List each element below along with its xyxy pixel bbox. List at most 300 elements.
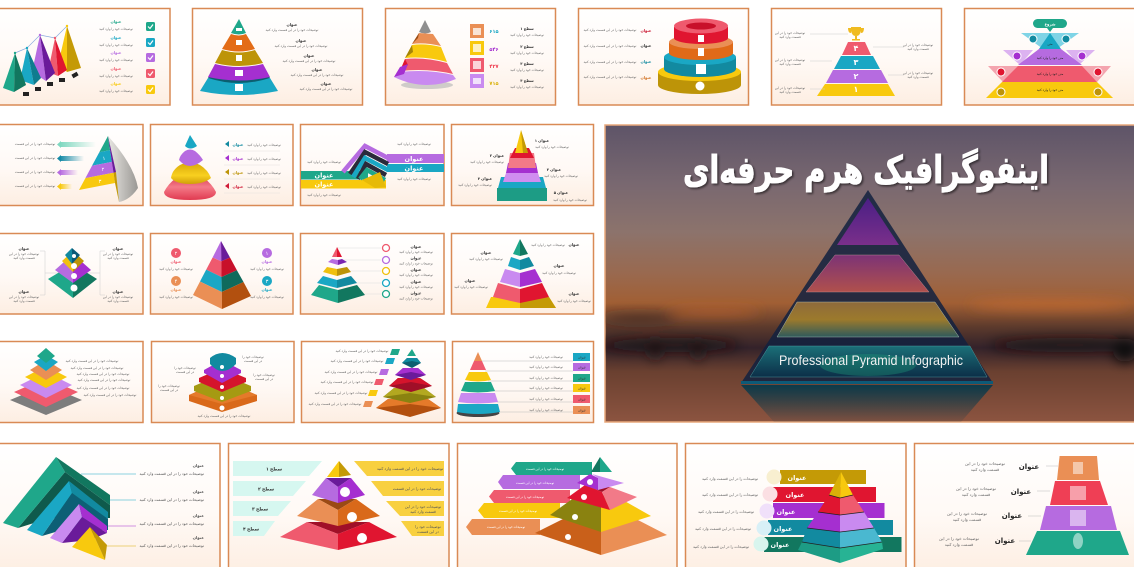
numbered circles [997,35,1102,96]
arrow text: توضیحات خود را در این قسمت [15,184,55,188]
values: ۵۴۶ [489,47,499,53]
numbered circles: ۲ [175,251,178,257]
band text: عنوان [315,172,333,180]
text notes: عنوان [18,290,30,294]
panel: curved layered pyramid [192,8,362,105]
text list: توضیحات خود را در این قسمت وارد کنید [584,75,637,79]
list rows: توضیحات خود را وارد کنید [247,185,281,189]
text notes: عنوان ۵ [554,191,569,195]
band text [307,142,431,197]
text notes: توضیحات خود را [174,366,196,370]
panel: diamond pyramid [0,234,143,314]
start badge [1033,19,1067,32]
chart: half cone: ۱ [103,156,105,162]
bar titles [771,475,806,549]
text list: توضیحات خود را در این قسمت وارد کنید [66,359,119,363]
text notes: قسمت وارد کنید [907,47,929,51]
text notes: توضیحات خود را در این [903,71,933,75]
label tabs: عنوان [578,376,586,380]
chart: steps [497,130,547,201]
text notes: قسمت وارد کنید [945,542,973,547]
text notes [775,31,933,94]
text notes: توضیحات خود را در این قسمت وارد کنید [198,414,251,418]
text list: توضیحات خود را وارد کنید [529,386,563,390]
band text: توضیحات خود را وارد کنید [307,193,341,197]
level text [243,466,283,532]
arrow tags: توضیحات خود را در این قسمت [506,495,544,499]
text notes: عنوان ۲ [490,154,505,158]
text notes: عنوان [568,292,580,296]
panel: stacked rings [578,8,748,105]
text list: عنوان [640,60,652,64]
panel: levels pyramid with tags [228,444,449,567]
text notes: توضیحات خود را در این [775,58,805,62]
text notes: توضیحات خود را در این قسمت وارد کنید [139,543,204,548]
level text: توضیحات خود را وارد کنید [510,68,544,72]
description text: توضیحات را در این قسمت وارد کنید [698,510,754,514]
text notes: توضیحات خود را در این [9,295,39,299]
text notes: توضیحات خود را وارد کنید [553,198,587,202]
text notes: توضیحات خود را وارد کنید [544,174,578,178]
text notes: عنوان ۱ [535,139,550,143]
label tabs [573,353,590,414]
text notes: عنوان [464,279,476,283]
arrow tags: توضیحات خود را در این قسمت [526,467,564,471]
text notes: قسمت وارد کنید [971,467,999,472]
wings [988,33,1113,98]
level text: توضیحات خود را وارد کنید [510,85,544,89]
text notes: عنوان [193,489,204,494]
text notes: عنوان ۳ [547,168,562,172]
level text: سطح ۴ [520,79,534,83]
arrows [57,141,96,190]
brackets [40,251,105,295]
text notes: قسمت وارد کنید [13,299,35,303]
text notes: در این قسمت [244,359,263,363]
band text: توضیحات خود را وارد کنید [307,160,341,164]
leader lines [81,474,136,500]
text list: توضیحات خود را وارد کنید [399,273,433,277]
checklist text: عنوان [110,67,122,71]
chart: diamond layers [10,348,82,415]
text list [584,28,652,80]
pyramid reflection [741,385,993,422]
text notes: عنوان [480,251,492,255]
text notes: در این قسمت [255,377,274,381]
text list: توضیحات خود را در این قسمت وارد کنید [321,380,374,384]
chart: half cone: ۲ [102,167,105,173]
panel: start pyramid with wings [964,8,1134,105]
text notes: عنوان [170,288,182,292]
text notes [158,355,275,418]
text list [529,355,563,412]
panel: trophy pyramid [772,8,942,105]
list rows [224,141,281,193]
text notes: توضیحات خود را در این قسمت وارد کنید [139,497,204,502]
text notes: توضیحات خود را در این قسمت وارد کنید [139,521,204,526]
numbered circles: ۱ [266,251,268,257]
text notes [159,260,284,299]
icon squares [470,24,484,88]
text notes: قسمت وارد کنید [953,517,981,522]
text notes: توضیحات خود را در این [775,31,805,35]
layer text: متن [1047,42,1053,46]
circles [382,244,390,298]
chart: numbered layers [817,42,895,96]
text notes: توضیحات خود را وارد کنید [454,285,488,289]
text list: عنوان [640,29,652,33]
chart: chevrons [3,457,110,560]
bars [764,470,902,552]
text list [66,359,137,397]
checklist text [99,20,133,93]
chart: five triangular pyramids [3,25,81,92]
icons under pyramids [23,72,79,96]
checkboxes [146,22,155,94]
text notes: عنوان [112,290,124,294]
text list: توضیحات خود را وارد کنید [529,397,563,401]
text list: توضیحات خود را وارد کنید [399,296,433,300]
text notes: توضیحات خود را وارد کنید [531,243,565,247]
text notes: عنوان [18,247,30,251]
text notes: توضیحات خود را وارد کنید [159,267,193,271]
list rows: توضیحات خود را وارد کنید [247,157,281,161]
text notes: توضیحات خود را وارد کنید [535,145,569,149]
layer text: متن خود را وارد کنید [1037,56,1064,60]
text notes [458,139,587,202]
leader lines [810,34,904,89]
text list: توضیحات خود را در این قسمت وارد کنید [325,370,378,374]
text notes: در این قسمت [160,388,179,392]
glass pyramid [741,190,993,384]
list rows: عنوان [232,157,244,161]
text notes: توضیحات خود را وارد کنید [250,295,284,299]
text notes: عنوان [553,264,565,268]
description text: در این قسمت [417,530,439,534]
text list: توضیحات خود را در این قسمت وارد کنید [77,372,130,376]
level text: توضیحات خود را وارد کنید [510,33,544,37]
chart: pyramid [193,241,251,309]
chart: numbered layers: ۴ [854,44,859,53]
text notes: توضیحات خود را وارد کنید [470,160,504,164]
circles [754,470,782,552]
text notes: توضیحات خود را وارد کنید [458,183,492,187]
description text: توضیحات را در این قسمت وارد کنید [693,545,749,549]
text notes: توضیحات خود را وارد کنید [557,299,591,303]
text list: توضیحات خود را وارد کنید [529,355,563,359]
chart: stacked frustums [1026,456,1129,555]
text list: عنوان [410,280,422,284]
description text: توضیحات را در این قسمت وارد کنید [702,477,758,481]
text notes: عنوان [112,247,124,251]
arrow tags [466,462,592,535]
text list: عنوان [295,39,307,43]
chart: numbered layers: ۱ [854,85,858,94]
checklist text: توضیحات خود را وارد کنید [99,43,133,47]
bar titles: عنوان [777,509,795,516]
text list: توضیحات خود را وارد کنید [529,365,563,369]
text list: توضیحات خود را در این قسمت وارد کنید [584,60,637,64]
label tabs: عنوان [578,398,586,402]
text notes: قسمت وارد کنید [13,256,35,260]
text list: توضیحات خود را در این قسمت وارد کنید [77,386,130,390]
text notes: توضیحات خود را در این [965,461,1006,466]
text notes: عنوان [193,513,204,518]
arrow tags: توضیحات خود را در این قسمت [499,509,537,513]
text list: توضیحات خود را در این قسمت وارد کنید [71,366,124,370]
text list [266,23,353,91]
chart: numbered layers: ۳ [854,58,859,67]
text list [309,349,389,406]
layer text: متن خود را وارد کنید [1037,72,1064,76]
checklist text: توضیحات خود را وارد کنید [99,74,133,78]
chart: pyramid [280,461,397,550]
hero panel: sunset pyramid [600,125,1134,422]
band text: عنوان [405,156,423,163]
description text: توضیحات خود را در این قسمت وارد کنید [377,466,443,471]
values: ۶۱۵ [489,29,499,35]
text notes: عنوان [995,538,1015,545]
text list: توضیحات خود را در این قسمت وارد کنید [331,359,384,363]
description text: قسمت وارد کنید [410,510,436,514]
text list: توضیحات خود را در این قسمت وارد کنید [78,378,131,382]
text notes: قسمت وارد کنید [962,492,990,497]
chart: half cone [79,136,138,202]
label tabs: عنوان [578,386,586,390]
text list: عنوان [311,68,323,72]
band text: عنوان [405,166,423,172]
text list: توضیحات خود را وارد کنید [399,262,433,266]
level text: سطح ۳ [520,62,534,66]
panel: cone with label tabs [452,342,594,422]
text notes: توضیحات خود را در این [775,86,805,90]
label tabs: عنوان [578,408,586,412]
panel: rounded stepped pyramid [152,342,294,422]
panel: bar pyramids with checklist [0,8,170,105]
text notes: قسمت وارد کنید [779,35,801,39]
text notes: در این قسمت [176,370,195,374]
arrow text: توضیحات خود را در این قسمت [15,170,55,174]
text notes: قسمت وارد کنید [107,256,129,260]
level text [510,27,544,89]
text list: عنوان [410,256,422,260]
chart: frustums [311,247,365,303]
panel: chevron bands [300,124,444,206]
arrow text: توضیحات خود را در این قسمت [15,142,55,146]
text list: توضیحات خود را وارد کنید [399,250,433,254]
text notes: قسمت وارد کنید [907,75,929,79]
values: ۴۲۷ [489,64,499,70]
list rows: عنوان [232,185,244,189]
chart: half cone: ۳ [99,179,102,185]
description text: توضیحات را در این قسمت وارد کنید [702,493,758,497]
panel: cone with icon squares [386,8,556,105]
text list: توضیحات خود را وارد کنید [399,285,433,289]
arrow text: توضیحات خود را در این قسمت [15,156,55,160]
checklist text: عنوان [110,82,122,86]
text list: عنوان [410,292,422,296]
text list: توضیحات خود را در این قسمت وارد کنید [275,44,328,48]
text notes: توضیحات خود را وارد کنید [159,295,193,299]
text notes: توضیحات خود را [253,373,275,377]
bar titles: عنوان [788,475,806,482]
chart: layers [376,349,441,417]
text notes [9,247,133,303]
level text: سطح ۱ [266,466,283,472]
tags [363,349,400,407]
cone shadow [401,81,453,89]
values [489,29,499,87]
arrow tags: توضیحات خود را در این قسمت [516,481,554,485]
text notes: توضیحات خود را [242,355,264,359]
chart: stacked cones [164,135,216,200]
chart: pyramid [798,472,883,563]
panel: seven layer diamond pyramid [0,342,143,422]
text notes: توضیحات خود را در این [947,511,988,516]
text list: توضیحات خود را در این قسمت وارد کنید [315,391,368,395]
level text: سطح ۲ [520,45,534,49]
text notes: عنوان [261,288,273,292]
subtitle: Professional Pyramid Infographic [779,352,963,368]
text list: عنوان [410,245,422,249]
text notes: قسمت وارد کنید [779,90,801,94]
chevrons [343,146,388,180]
label tabs: عنوان [578,356,586,360]
description text: توضیحات خود را در این قسمت [393,487,441,491]
chart: isometric layers [535,457,667,555]
bar titles: عنوان [771,542,789,549]
panel: frustum tower [914,444,1134,567]
text notes [454,243,591,303]
checklist text: عنوان [110,20,122,24]
panel: isometric pyramid with arrows [458,444,677,567]
description text: توضیحات خود را [415,525,441,529]
chart: numbered layers: ۲ [854,72,859,81]
numbered circles [171,248,272,286]
numbered circles: ۳ [266,279,269,285]
description text: توضیحات خود را در این [405,505,441,509]
panel: stepped pyramid [452,124,594,206]
text list: توضیحات خود را در این قسمت وارد کنید [584,28,637,32]
icon: yellow cap [362,172,386,188]
text notes: عنوان [568,243,580,247]
text list: توضیحات خود را در این قسمت وارد کنید [283,59,336,63]
layer text [1037,42,1064,92]
text list [399,245,433,300]
label tabs: عنوان [578,366,586,370]
bar titles: عنوان [786,492,804,499]
text list: توضیحات خود را در این قسمت وارد کنید [300,87,353,91]
text notes [939,461,1039,547]
text notes: توضیحات خود را در این [956,486,997,491]
text list: توضیحات خود را وارد کنید [529,376,563,380]
mint level tags [233,461,322,536]
text notes: توضیحات خود را وارد کنید [469,257,503,261]
text notes: توضیحات خود را وارد کنید [542,271,576,275]
level text: توضیحات خود را وارد کنید [510,51,544,55]
arrow tags: توضیحات خود را در این قسمت [487,525,525,529]
text notes: توضیحات خود را در این قسمت وارد کنید [139,471,204,476]
start badge: شروع [1044,22,1056,26]
chart: central pyramid [986,33,1113,98]
text notes: عنوان [170,260,182,264]
checklist text: عنوان [110,51,122,55]
text list: عنوان [640,44,652,48]
panel: nested 3D chevrons [0,444,220,567]
leader lines [337,248,381,294]
text list: عنوان [303,54,315,58]
level text: سطح ۳ [252,506,269,512]
icon: trophy [848,27,864,40]
text list: توضیحات خود را در این قسمت وارد کنید [336,349,389,353]
bar titles: عنوان [774,526,792,533]
text list: توضیحات خود را در این قسمت وارد کنید [584,44,637,48]
text list: توضیحات خود را در این قسمت وارد کنید [84,393,137,397]
bands [301,154,444,188]
chart: diamond layers [48,248,97,298]
text notes: قسمت وارد کنید [779,62,801,66]
text notes: توضیحات خود را [158,384,180,388]
level text: سطح ۲ [258,486,275,492]
description text [377,466,443,534]
chart: cylinders [658,18,741,94]
panel: stacked rounded cones [150,124,293,206]
numbered circles: ۴ [175,279,178,285]
leader lines [1019,466,1058,541]
checklist text: عنوان [110,36,122,40]
text notes: توضیحات خود را در این [9,252,39,256]
panel: arrows and half cone [0,124,143,206]
chart: cone [456,352,500,417]
description text: توضیحات را در این قسمت وارد کنید [695,527,751,531]
panel: 3D pyramid with circles [150,234,293,314]
description text [693,477,758,549]
list rows: توضیحات خود را وارد کنید [247,171,281,175]
text list: عنوان [320,82,332,86]
yellow description tags [354,461,444,536]
checklist text: توضیحات خود را وارد کنید [99,89,133,93]
text notes: توضیحات خود را در این [939,536,980,541]
text notes: عنوان ۴ [478,177,493,181]
text notes: عنوان [261,260,273,264]
list rows: عنوان [232,171,244,175]
text list: عنوان [286,23,298,27]
panel: stepped 3D pyramid with labels [452,234,594,314]
chart: layers [486,239,556,308]
panel: separated frustums [300,234,444,314]
band text: عنوان [315,182,333,188]
values: ۷۱۵ [489,81,499,87]
text notes: توضیحات خود را در این [903,43,933,47]
leader lines [482,361,573,412]
text notes [139,463,204,548]
checklist text: توضیحات خود را وارد کنید [99,27,133,31]
chart: cone layers [394,20,456,85]
level text: سطح ۱ [520,27,534,31]
text list: توضیحات خود را در این قسمت وارد کنید [309,402,362,406]
panel: pyramid with tags [302,342,445,422]
text list: توضیحات خود را وارد کنید [529,408,563,412]
text notes: قسمت وارد کنید [107,299,129,303]
checklist text: توضیحات خود را وارد کنید [99,58,133,62]
text notes: توضیحات خود را وارد کنید [250,267,284,271]
band text: توضیحات خود را وارد کنید [397,177,431,181]
text notes: توضیحات خود را در این [103,252,133,256]
text notes: عنوان [1019,464,1039,471]
text notes: عنوان [193,535,204,540]
list rows: عنوان [232,143,244,147]
arrow text [15,142,55,188]
